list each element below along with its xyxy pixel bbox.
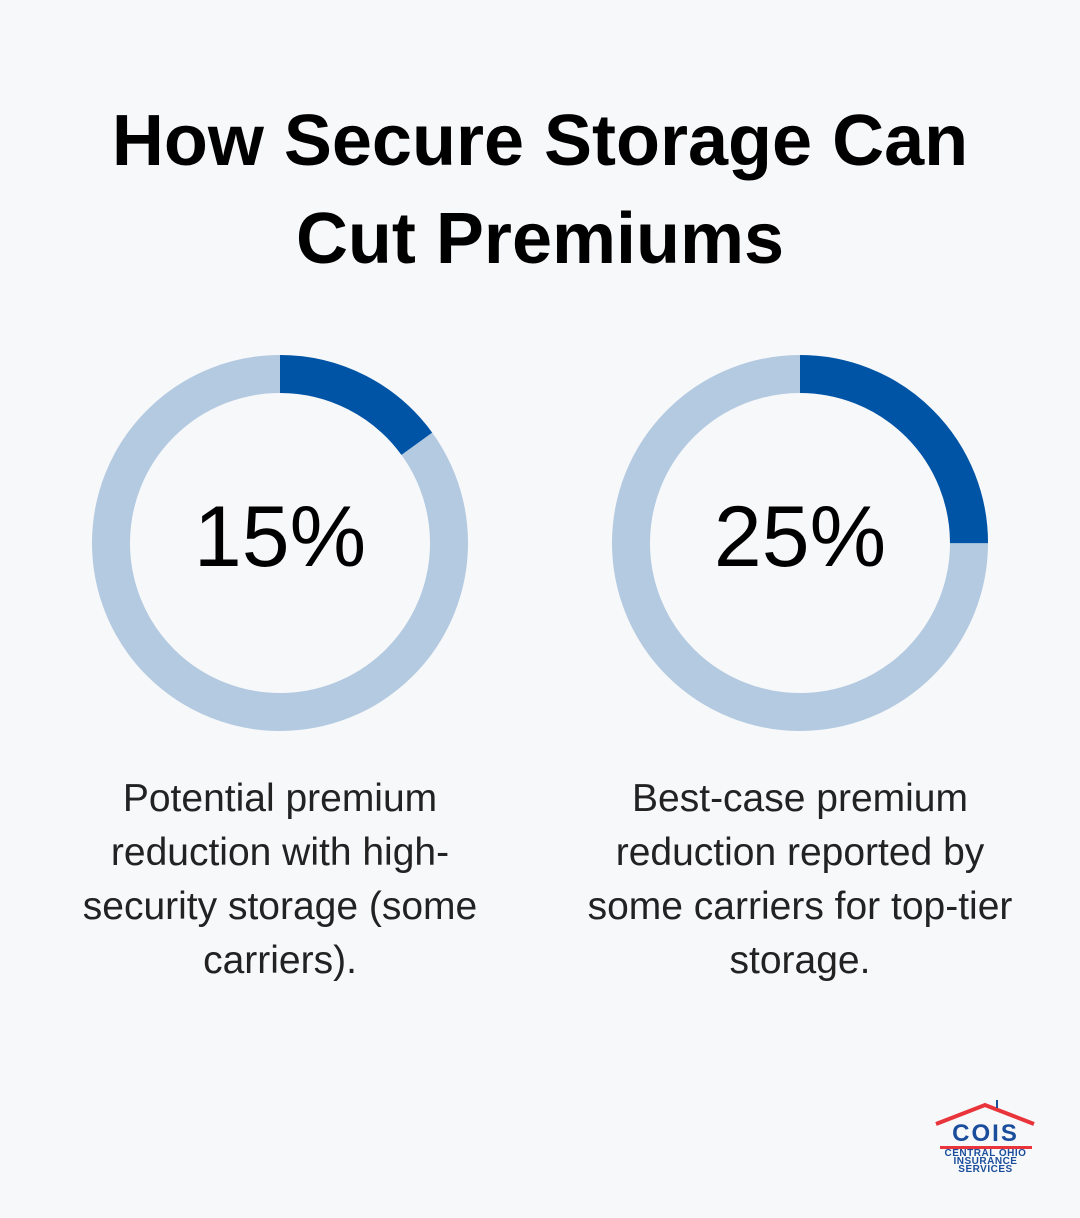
caption left: security storage (some xyxy=(83,885,477,928)
title: How Secure Storage Can xyxy=(112,101,968,181)
logo: COIS xyxy=(935,1100,1035,1175)
title xyxy=(112,101,968,279)
caption left: Potential premium xyxy=(123,777,437,820)
donut chart: 25% xyxy=(612,355,988,731)
caption right: storage. xyxy=(730,939,870,982)
caption left xyxy=(83,777,477,982)
caption left: carriers). xyxy=(203,939,357,982)
caption right: reduction reported by xyxy=(616,831,984,874)
number 25%: 25% xyxy=(714,489,886,585)
caption right xyxy=(588,777,1012,982)
logo: COIS: COIS xyxy=(952,1120,1019,1147)
logo: COIS: SERVICES xyxy=(958,1164,1013,1175)
caption right: some carriers for top-tier xyxy=(588,885,1012,928)
caption left: reduction with high- xyxy=(111,831,449,874)
logo: COIS: CENTRAL OHIO xyxy=(945,1148,1026,1159)
caption right: Best-case premium xyxy=(632,777,968,820)
number 15%: 15% xyxy=(194,489,366,585)
title: Cut Premiums xyxy=(296,199,784,279)
logo: COIS: INSURANCE xyxy=(954,1156,1017,1167)
